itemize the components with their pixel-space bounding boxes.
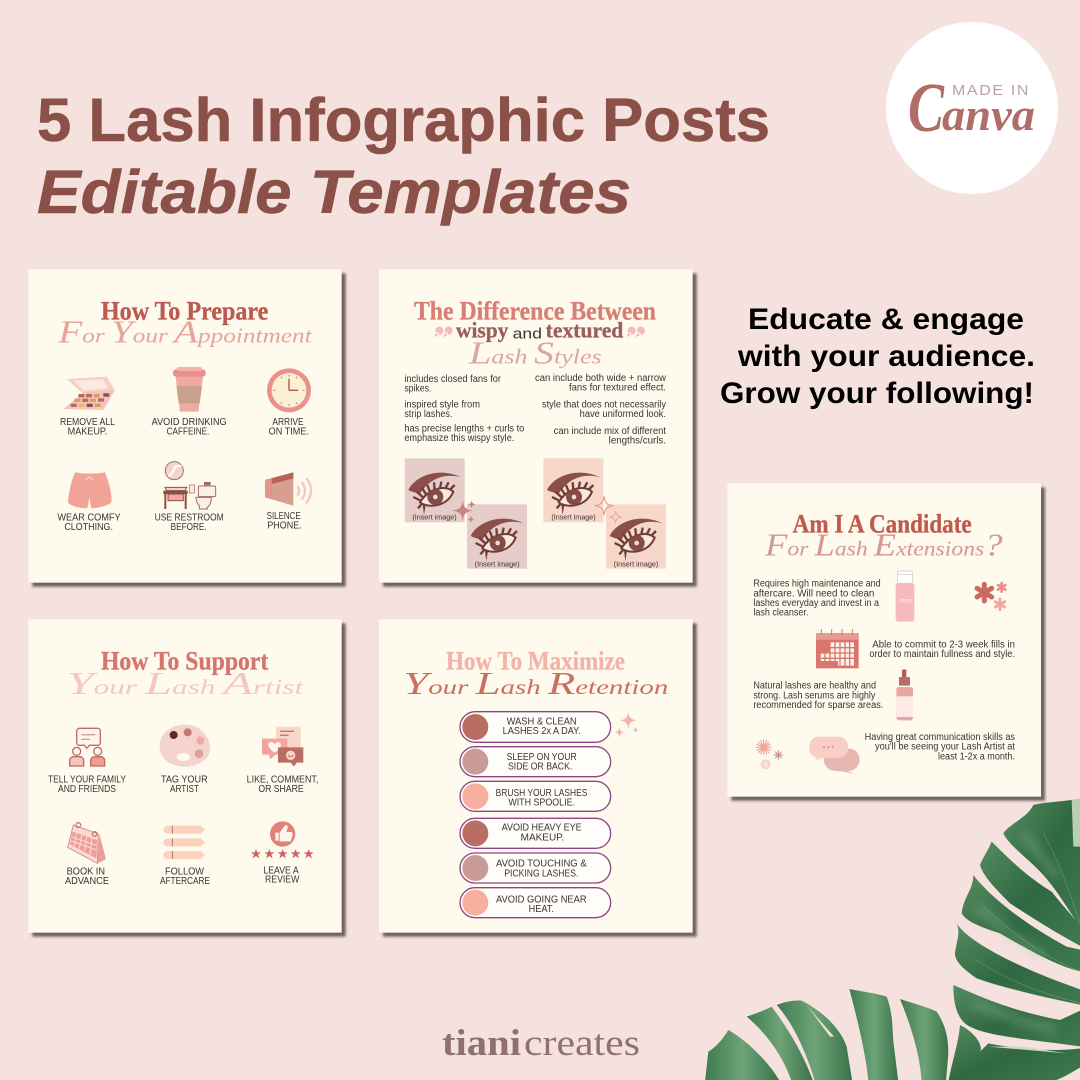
label (247, 775, 318, 795)
label (155, 513, 224, 533)
tagline: Grow your following! (720, 377, 1034, 410)
brand: tiani creates: tiani (442, 1023, 521, 1064)
label: MAKEUP. (68, 426, 107, 437)
subheading: For Lash Extensions? (764, 527, 1003, 563)
label: LIKE, COMMENT, (247, 775, 318, 786)
label: PHONE. (267, 520, 302, 531)
icon: calendar (816, 629, 859, 668)
badge: made in canva: anva (942, 89, 1035, 140)
label: REVIEW (265, 875, 300, 886)
monstera leaf: right (948, 798, 1080, 1080)
list item 5: PICKING LASHES. (504, 868, 578, 879)
label (267, 511, 302, 531)
title: Editable Templates (37, 158, 631, 226)
text: communication (865, 732, 1015, 762)
list item 1 (460, 712, 611, 742)
text: textured points: have uniformed look. (580, 409, 666, 420)
image: wispy 2: (Insert image) (475, 559, 520, 568)
text: maintenance: Requires high maintenance and (753, 579, 881, 590)
text: textured points: lengths/curls. (609, 436, 666, 447)
script line: Lash Styles (468, 334, 602, 370)
icon: flowers (977, 583, 1005, 610)
list item 4: MAKEUP. (521, 832, 564, 843)
subheading: wispy and textured: wispy (456, 317, 508, 342)
label (60, 417, 115, 437)
label: TELL YOUR FAMILY (48, 775, 126, 786)
text: communication: you'll be seeing your Lash Artist at (875, 742, 1015, 753)
badge: made in canva: C (908, 70, 945, 147)
panel: lash retention (379, 619, 697, 937)
text: wispy points (404, 374, 525, 444)
label (57, 513, 121, 533)
text: commitment: Able to commit to 2-3 week fills in (872, 639, 1015, 650)
text: communication: least 1-2x a month. (938, 751, 1015, 762)
list item 6: AVOID GOING NEAR (496, 894, 587, 905)
label (269, 417, 309, 437)
icon: desk calendar (68, 823, 106, 863)
label: OR SHARE (258, 784, 304, 795)
icon: clock (267, 368, 311, 412)
list item 4 (460, 818, 611, 848)
list item 5 (460, 853, 611, 883)
icon: cleanser bottle: foam (899, 598, 913, 604)
title (37, 86, 770, 226)
icon: muted speaker (265, 472, 311, 506)
tagline: Educate & engage (748, 303, 1024, 336)
subheading: Your Lash Artist (67, 665, 305, 701)
list item 6: HEAT. (529, 904, 554, 915)
tagline: with your audience. (737, 340, 1035, 373)
label: ON TIME. (269, 426, 309, 437)
sparkles: outlined (595, 496, 622, 523)
text: wispy points: includes closed fans for (404, 374, 502, 385)
label: BOOK IN (67, 866, 105, 877)
image: wispy 1: (Insert image) (412, 513, 457, 522)
text: textured points: fans for textured effect. (569, 383, 666, 394)
icon: serum bottle (896, 669, 913, 720)
icon: aftercare list (163, 826, 205, 859)
icon: coffee cup (173, 367, 206, 412)
list item 3: BRUSH YOUR LASHES (496, 788, 588, 799)
icon: chat bubbles (809, 737, 860, 774)
icon: paint palette (160, 725, 210, 767)
text: maintenance: lash cleanser. (753, 608, 808, 619)
list item 6 (460, 888, 611, 918)
label: ADVANCE (65, 876, 109, 887)
label (152, 417, 227, 437)
panel: am i a candidate (727, 483, 1045, 801)
subheading: wispy and textured: textured (546, 317, 623, 342)
label: ARRIVE (272, 417, 304, 428)
panel: how to prepare (28, 269, 346, 587)
list item 1: LASHES 2x A DAY. (503, 726, 581, 737)
label: REMOVE ALL (60, 417, 115, 428)
subheading: Your Lash Retention (403, 665, 668, 701)
icon: thumbs up and stars (251, 821, 314, 858)
icon: makeup palette (63, 377, 115, 410)
label (48, 775, 126, 795)
label: AND FRIENDS (58, 784, 116, 795)
sparkles: filled (452, 500, 476, 523)
text: natural lashes: Natural lashes are healthy and (753, 681, 876, 692)
badge: made in canva: MADE IN (952, 83, 1030, 99)
text: wispy points: has precise lengths + curls to (404, 423, 525, 434)
text: wispy points: spikes. (404, 384, 431, 395)
text: natural lashes: recommended for sparse areas. (753, 700, 883, 711)
brand: tiani creates: creates (524, 1023, 640, 1064)
image: textured 1 (543, 458, 603, 522)
image: textured 2 (606, 504, 666, 569)
label: FOLLOW (165, 866, 205, 877)
list item 3: WITH SPOOLIE. (508, 798, 575, 809)
text: wispy points: emphasize this wispy style. (404, 433, 514, 444)
text: natural lashes (753, 681, 883, 711)
label: SILENCE (267, 511, 301, 522)
heading: Am I A Candidate (793, 509, 972, 538)
text: textured points (535, 373, 667, 447)
brand: tiani creates (442, 1023, 640, 1064)
list item 5: AVOID TOUCHING & (496, 859, 587, 870)
label (263, 865, 300, 886)
text: textured points: style that does not necessarily (542, 399, 666, 410)
list item 2: SLEEP ON YOUR (507, 752, 577, 763)
heading: The Difference Between (414, 296, 656, 325)
heading: How To Prepare (101, 296, 268, 325)
icon: social bubbles (262, 727, 303, 767)
text: commitment: order to maintain fullness and style. (869, 649, 1015, 660)
title: 5 Lash Infographic Posts (37, 86, 770, 154)
label: USE RESTROOM (155, 513, 224, 524)
icon: shorts (68, 472, 112, 508)
list item 2: SIDE OR BACK. (508, 762, 572, 773)
tagline (720, 303, 1035, 410)
icon: small flowers (756, 740, 783, 769)
image: wispy 1 (405, 458, 465, 522)
heading: How To Support (101, 646, 269, 675)
image: wispy 2 (467, 504, 527, 569)
text: communication: Having great communication skills as (865, 732, 1015, 743)
subheading: For Your Appointment (57, 314, 313, 350)
panel: how to support (28, 619, 346, 937)
label: WEAR COMFY (57, 513, 121, 524)
icon: cleanser bottle (896, 571, 914, 622)
subheading: wispy and textured: and (513, 326, 542, 342)
monstera leaf: bottom (705, 989, 948, 1080)
label (160, 866, 210, 887)
list item 4: AVOID HEAVY EYE (502, 823, 582, 834)
text: maintenance: lashes everyday and invest in a (753, 598, 879, 609)
icon: vanity and toilet (163, 462, 216, 509)
label: CLOTHING. (64, 522, 113, 533)
label: AFTERCARE (160, 876, 210, 887)
sparkles (614, 712, 639, 738)
label (65, 866, 109, 887)
icon: two people talking (70, 728, 105, 766)
label: LEAVE A (263, 865, 299, 876)
image: textured 2: (Insert image) (614, 559, 658, 568)
text: textured points: can include mix of different (554, 426, 666, 437)
text: wispy points: strip lashes. (404, 409, 452, 420)
label: TAG YOUR (161, 775, 208, 786)
list item 3 (460, 781, 611, 811)
text: commitment (869, 639, 1015, 660)
label: BEFORE. (171, 522, 207, 533)
panel: wispy vs textured (379, 269, 697, 587)
heading: How To Maximize (446, 646, 625, 675)
text: textured points: can include both wide + narrow (535, 373, 667, 384)
badge: made in canva (886, 22, 1058, 194)
list item 2 (460, 747, 611, 777)
text: natural lashes: strong. Lash serums are highly (753, 690, 875, 701)
image: textured 1: (Insert image) (551, 513, 596, 522)
label: AVOID DRINKING (152, 417, 227, 428)
label (161, 775, 208, 795)
text: wispy points: inspired style from (404, 399, 480, 410)
text: maintenance: aftercare. Will need to clean (753, 588, 874, 599)
label: ARTIST (170, 784, 199, 795)
list item 1: WASH & CLEAN (507, 716, 577, 727)
label: CAFFEINE. (167, 426, 209, 437)
subheading: wispy and textured (433, 317, 645, 342)
text: maintenance (753, 579, 881, 619)
